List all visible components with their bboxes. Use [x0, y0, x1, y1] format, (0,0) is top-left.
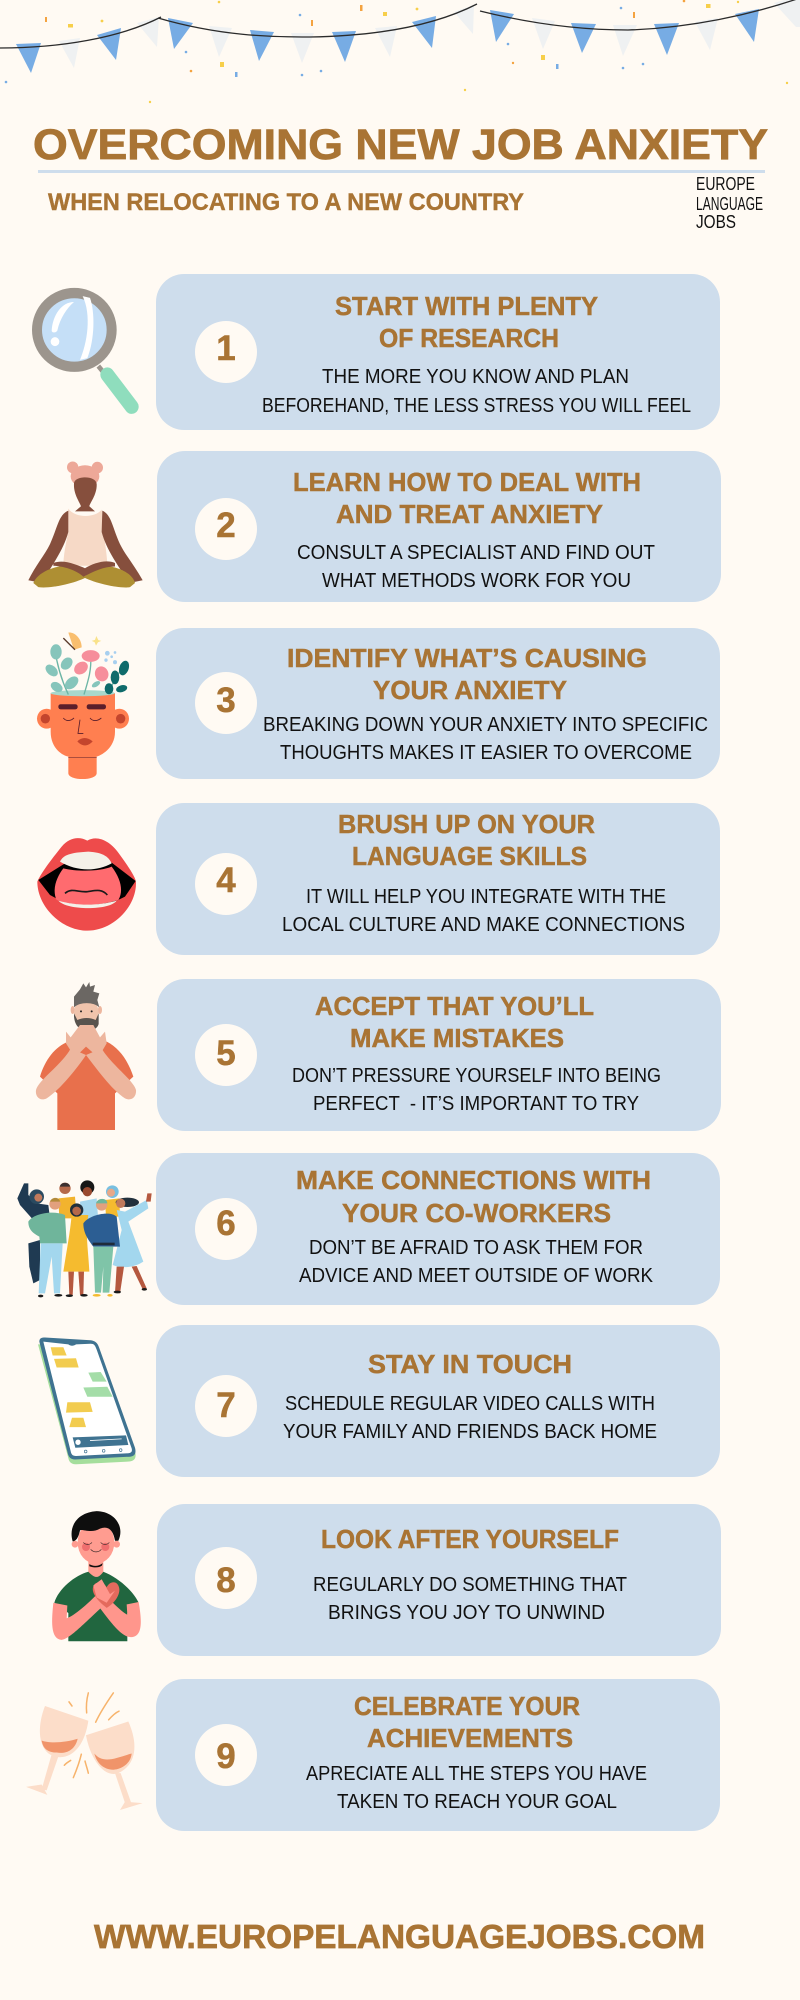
body: step 4: IT WILL HELP YOU INTEGRATE WITH THE: [306, 886, 666, 908]
panel: step 1: 1: [216, 329, 236, 368]
heading: step 6: [296, 1165, 651, 1228]
panel: step 3: [156, 628, 720, 779]
panel: step 6: 6: [216, 1204, 236, 1243]
body: step 2: CONSULT A SPECIALIST AND FIND OUT: [297, 542, 655, 564]
body: step 7: YOUR FAMILY AND FRIENDS BACK HOME: [283, 1421, 657, 1443]
body: step 1: [262, 366, 691, 417]
body: step 7: [283, 1393, 657, 1443]
body: step 1: BEFOREHAND, THE LESS STRESS YOU WILL FEEL: [262, 395, 691, 417]
panel: step 8: [157, 1504, 721, 1656]
icon: open mouth: [37, 838, 136, 931]
heading: step 1: [335, 291, 598, 353]
body: step 5: PERFECT - IT’S IMPORTANT TO TRY: [313, 1093, 639, 1115]
panel: step 2: [157, 451, 721, 602]
panel: step 4: 4: [216, 861, 236, 900]
heading: step 3: IDENTIFY WHAT’S CAUSING: [287, 643, 647, 673]
body: step 3: [263, 714, 708, 764]
icon: magnifying glass: [37, 293, 132, 407]
heading: step 2: [293, 467, 641, 529]
panel: step 9: 9: [216, 1737, 236, 1776]
panel: step 3: 3: [216, 681, 236, 720]
panel: step 6: [156, 1153, 720, 1305]
panel: step 1: [156, 274, 720, 430]
subtitle: WHEN RELOCATING TO A NEW COUNTRY: [48, 189, 524, 216]
heading: step 1: OF RESEARCH: [379, 323, 559, 353]
panel: step 2: 2: [216, 506, 236, 545]
heading: step 5: ACCEPT THAT YOU’LL: [315, 991, 594, 1021]
icon: group of colleagues: [17, 1180, 152, 1297]
heading: step 7: STAY IN TOUCH: [368, 1349, 572, 1379]
bunting banner: [0, 0, 800, 73]
heading: step 8: LOOK AFTER YOURSELF: [321, 1524, 619, 1554]
logo: Europe Language Jobs: [696, 174, 763, 232]
body: step 2: WHAT METHODS WORK FOR YOU: [322, 570, 631, 592]
panel: step 5: 5: [216, 1034, 236, 1073]
icon: boy hugging heart: [52, 1511, 141, 1641]
body: step 5: DON’T PRESSURE YOURSELF INTO BEING: [292, 1065, 661, 1087]
body: step 1: THE MORE YOU KNOW AND PLAN: [322, 366, 629, 388]
confetti: [5, 0, 788, 103]
body: step 6: ADVICE AND MEET OUTSIDE OF WORK: [299, 1265, 654, 1287]
heading: step 4: [338, 809, 595, 871]
heading: step 3: [287, 643, 647, 705]
heading: step 6: MAKE CONNECTIONS WITH: [296, 1165, 651, 1195]
heading: step 1: START WITH PLENTY: [335, 291, 598, 321]
icon: head with flowers: [37, 633, 131, 779]
body: step 3: THOUGHTS MAKES IT EASIER TO OVERCOME: [280, 742, 692, 764]
heading: step 5: MAKE MISTAKES: [350, 1023, 564, 1053]
icon: smartphone chat: [38, 1338, 136, 1464]
panel: step 7: [156, 1325, 720, 1477]
icon: clinking wine glasses: [26, 1693, 143, 1810]
body: step 8: [313, 1574, 627, 1624]
body: step 2: [297, 542, 655, 592]
body: step 6: DON’T BE AFRAID TO ASK THEM FOR: [309, 1237, 643, 1259]
website url footer: WWW.EUROPELANGUAGEJOBS.COM: [94, 1918, 705, 1955]
heading: step 4: BRUSH UP ON YOUR: [338, 809, 595, 839]
heading: step 2: LEARN HOW TO DEAL WITH: [293, 467, 641, 497]
panel: step 5: [157, 979, 721, 1131]
body: step 8: REGULARLY DO SOMETHING THAT: [313, 1574, 627, 1596]
logo: Europe Language Jobs: JOBS: [696, 212, 736, 232]
body: step 8: BRINGS YOU JOY TO UNWIND: [328, 1602, 605, 1624]
heading: step 9: [354, 1691, 580, 1753]
body: step 9: [306, 1763, 647, 1813]
heading: step 2: AND TREAT ANXIETY: [336, 499, 603, 529]
heading: step 9: ACHIEVEMENTS: [367, 1723, 573, 1753]
icon: meditating woman: [28, 461, 143, 587]
heading: step 6: YOUR CO-WORKERS: [342, 1198, 611, 1228]
title: OVERCOMING NEW JOB ANXIETY: [33, 121, 768, 169]
body: step 4: LOCAL CULTURE AND MAKE CONNECTIONS: [282, 914, 685, 936]
body: step 6: [299, 1237, 654, 1287]
body: step 5: [292, 1065, 661, 1115]
body: step 3: BREAKING DOWN YOUR ANXIETY INTO SPECIFIC: [263, 714, 708, 736]
heading: step 3: YOUR ANXIETY: [373, 675, 567, 705]
heading: step 4: LANGUAGE SKILLS: [352, 841, 587, 871]
body: step 7: SCHEDULE REGULAR VIDEO CALLS WITH: [285, 1393, 655, 1415]
panel: step 8: 8: [216, 1561, 236, 1600]
heading: step 9: CELEBRATE YOUR: [354, 1691, 580, 1721]
panel: step 7: 7: [216, 1386, 236, 1425]
body: step 4: [282, 886, 685, 936]
logo: Europe Language Jobs: LANGUAGE: [696, 194, 763, 214]
logo: Europe Language Jobs: EUROPE: [696, 174, 755, 194]
panel: step 9: [156, 1679, 720, 1831]
icon: worried man: [36, 982, 136, 1130]
body: step 9: TAKEN TO REACH YOUR GOAL: [337, 1791, 617, 1813]
panel: step 4: [156, 803, 720, 955]
body: step 9: APRECIATE ALL THE STEPS YOU HAVE: [306, 1763, 647, 1785]
heading: step 5: [315, 991, 594, 1053]
